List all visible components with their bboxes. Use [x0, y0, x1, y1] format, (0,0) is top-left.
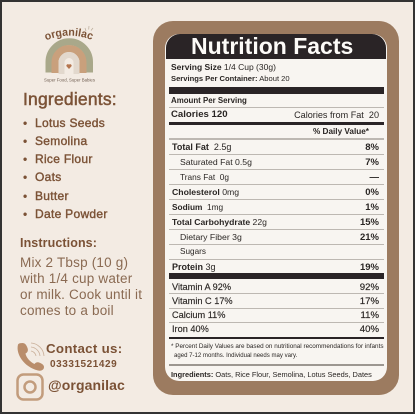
instructions text — [20, 255, 142, 318]
nutrient rows: Sodium 1mg — [172, 202, 223, 212]
ingredients list: • — [23, 207, 27, 221]
serving information: Servings Per Container: About 20 — [171, 74, 290, 83]
nutrient rows: Protein 3g — [172, 262, 216, 272]
vitamin rows: 40% — [360, 324, 379, 335]
ingredients list: Rice Flour — [35, 152, 93, 166]
nutrient rows: Total Carbohydrate 22g — [172, 217, 267, 227]
icon: instagram — [16, 373, 44, 401]
nutrient rows: 8% — [365, 142, 379, 153]
ingredients list: Date Powder — [35, 207, 108, 221]
instructions text: comes to a boil — [20, 303, 114, 318]
rainbow arcs — [49, 42, 90, 74]
amount per serving: Amount Per Serving — [171, 96, 247, 105]
icon: heart — [66, 64, 72, 69]
nutrient rows: Saturated Fat 0.5g — [180, 157, 252, 167]
nutrient rows: 19% — [360, 262, 379, 273]
instructions text: or milk. Cook until it — [20, 287, 142, 302]
contact heading: Contact us: — [46, 341, 122, 356]
sparkle rays — [85, 26, 93, 31]
nutrient rows: Sugars — [180, 247, 206, 256]
serving information: Serving Size 1/4 Cup (30g) — [171, 62, 276, 72]
thick divider — [169, 273, 384, 279]
calories: Calories 120 — [171, 109, 228, 120]
ingredients list: Lotus Seeds — [35, 116, 105, 130]
ingredients list: • — [23, 189, 27, 203]
ingredients list — [23, 116, 108, 221]
ingredients list: • — [23, 116, 27, 130]
panel: nutrition card frame — [153, 21, 399, 395]
ingredients list: Oats — [35, 170, 62, 184]
nutrient rows: 15% — [360, 217, 379, 228]
title: Nutrition Facts — [191, 33, 353, 59]
logo — [44, 26, 95, 82]
nutrient rows: Dietary Fiber 3g — [180, 232, 242, 242]
instagram handle: @organilac — [48, 377, 125, 393]
instructions text: with 1/4 cup water — [20, 271, 132, 286]
nutrient rows: — — [370, 172, 379, 183]
phone number: 03331521429 — [50, 359, 117, 370]
vitamin rows: Calcium 11% — [172, 310, 225, 320]
thick divider — [169, 87, 384, 94]
nutrient rows: Trans Fat 0g — [180, 172, 229, 182]
nutrient rows: 1% — [365, 202, 379, 213]
title bar — [166, 34, 386, 59]
nutrient rows: 21% — [360, 232, 379, 243]
footnote — [171, 343, 384, 359]
calories — [171, 109, 379, 120]
ingredients list: • — [23, 152, 27, 166]
ingredients line: Ingredients: Oats, Rice Flour, Semolina, Lotus Seeds, Dates — [171, 370, 372, 379]
tagline: Super Food, Super Babies — [44, 78, 95, 82]
calories: Calories from Fat 20 — [294, 110, 379, 120]
ingredients list: Butter — [35, 189, 69, 203]
vitamin rows: 11% — [360, 310, 379, 321]
instructions text: Mix 2 Tbsp (10 g) — [20, 255, 128, 270]
nutrient rows: Total Fat 2.5g — [172, 142, 231, 152]
panel: nutrition facts — [165, 34, 387, 381]
serving information — [171, 62, 290, 83]
vitamin rows: Iron 40% — [172, 324, 209, 334]
ingredients list: Semolina — [35, 134, 87, 148]
vitamin rows — [169, 282, 384, 335]
instructions heading: Instructions: — [20, 236, 97, 250]
nutrient rows: 7% — [365, 157, 379, 168]
ingredients heading: Ingredients: — [23, 89, 117, 109]
nutrient rows: 0% — [365, 187, 379, 198]
nutrient rows: Cholesterol 0mg — [172, 187, 239, 197]
brand name: organilac — [45, 28, 93, 40]
footnote: * Percent Daily Values are based on nutritional recommendations for infants — [171, 343, 384, 350]
icon: phone — [18, 342, 44, 371]
vitamin rows: 92% — [360, 282, 379, 293]
footnote: aged 7-12 months. Individual needs may vary. — [174, 353, 297, 359]
ingredients list: • — [23, 134, 27, 148]
vitamin rows: Vitamin A 92% — [172, 282, 231, 292]
vitamin rows: Vitamin C 17% — [172, 296, 233, 306]
ingredients list: • — [23, 170, 27, 184]
vitamin rows: 17% — [360, 296, 379, 307]
daily value heading: % Daily Value* — [313, 127, 369, 136]
nutrient rows — [169, 142, 384, 273]
